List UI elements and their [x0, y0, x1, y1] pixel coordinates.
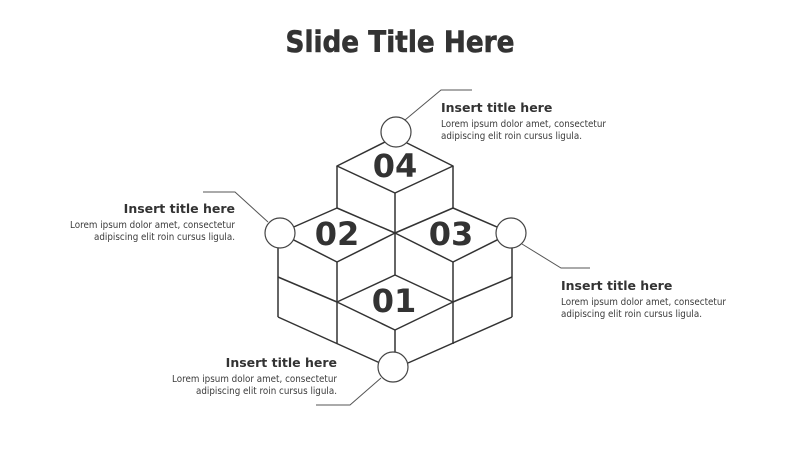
text block 02: [70, 201, 235, 243]
text block 01: adipiscing elit roin cursus ligula.: [196, 386, 337, 397]
text block 01: Insert title here: [226, 355, 337, 370]
text block 03: Insert title here: [561, 278, 672, 293]
text block 03: Lorem ipsum dolor amet, consectetur: [561, 297, 726, 308]
number 04: 04: [373, 147, 417, 185]
text block 03: adipiscing elit roin cursus ligula.: [561, 309, 702, 320]
text block 02: Insert title here: [124, 201, 235, 216]
cube stack: [278, 137, 512, 363]
title: Slide Title Here: [286, 25, 514, 59]
cube 04: [337, 137, 453, 233]
leader lines: [203, 90, 590, 405]
text block 01: Lorem ipsum dolor amet, consectetur: [172, 374, 337, 385]
text block 04: Insert title here: [441, 100, 552, 115]
number 03: 03: [429, 215, 473, 253]
cube 02: [278, 208, 395, 344]
text block 01: [172, 355, 337, 397]
text block 03: [561, 278, 726, 320]
text block 04: adipiscing elit roin cursus ligula.: [441, 131, 582, 142]
cube 01: [278, 233, 512, 363]
text block 04: [441, 100, 606, 142]
number 02: 02: [315, 215, 359, 253]
circle markers: [265, 117, 526, 382]
text block 04: Lorem ipsum dolor amet, consectetur: [441, 119, 606, 130]
text block 02: adipiscing elit roin cursus ligula.: [94, 232, 235, 243]
number 01: 01: [372, 282, 416, 320]
text block 02: Lorem ipsum dolor amet, consectetur: [70, 220, 235, 231]
cube 03: [395, 208, 512, 344]
